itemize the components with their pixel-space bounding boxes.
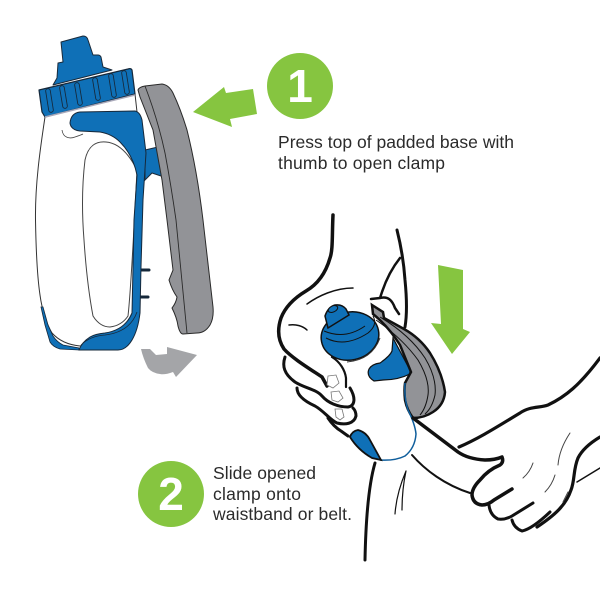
arrow: green pointing left (193, 87, 257, 127)
torso right line (397, 230, 406, 327)
clamp hinge (145, 147, 164, 180)
blue clamp arm (70, 111, 146, 350)
torso left line and palm (279, 215, 333, 386)
wrist edge (537, 437, 600, 527)
padded base in hand (372, 305, 445, 418)
step 2 text: clamp onto (213, 484, 301, 504)
clamp inner contour (81, 312, 137, 345)
illustration: bottle with open clamp (35, 36, 213, 377)
step 1 text: thumb to open clamp (278, 153, 445, 173)
blue clamp bottom (350, 430, 381, 460)
wrist line (577, 468, 600, 482)
arm gap triangle (371, 258, 400, 314)
fist fingers (489, 503, 550, 531)
fist creases (523, 433, 570, 502)
waist crease (395, 471, 406, 514)
finger nails (327, 375, 344, 420)
blue clamp in hand (368, 338, 410, 381)
step 1 text: Press top of padded base with (278, 132, 514, 152)
bottle body (35, 94, 138, 346)
step 2 badge (138, 461, 204, 527)
icon: grey rotation arrow (141, 347, 197, 377)
step 1 badge (267, 53, 333, 119)
illustration: hand holding bottle at waist (279, 215, 600, 560)
bottle body outline (380, 383, 416, 460)
clamp lower left strip (41, 307, 79, 350)
step 2 badge: 2 (158, 468, 184, 520)
thumb crease (62, 130, 83, 138)
upper arm line (459, 358, 600, 447)
hand fold lines (307, 288, 353, 304)
fingers (284, 357, 356, 436)
padded base (138, 84, 213, 334)
clamp pegs (140, 270, 149, 297)
arrow: green pointing down (431, 265, 470, 354)
bottle nozzle and cap (317, 304, 383, 366)
step 2 text: waistband or belt. (212, 504, 352, 524)
bottle nozzle (53, 36, 112, 85)
waist line (365, 463, 375, 560)
bottle cap collar (39, 69, 135, 117)
thumb fold (289, 325, 307, 330)
forearm upper edge (413, 418, 512, 505)
step 1 badge: 1 (287, 60, 313, 112)
bottle grip window (83, 142, 137, 327)
step 2 text: Slide opened (213, 463, 316, 483)
forearm lower edge (412, 455, 470, 493)
